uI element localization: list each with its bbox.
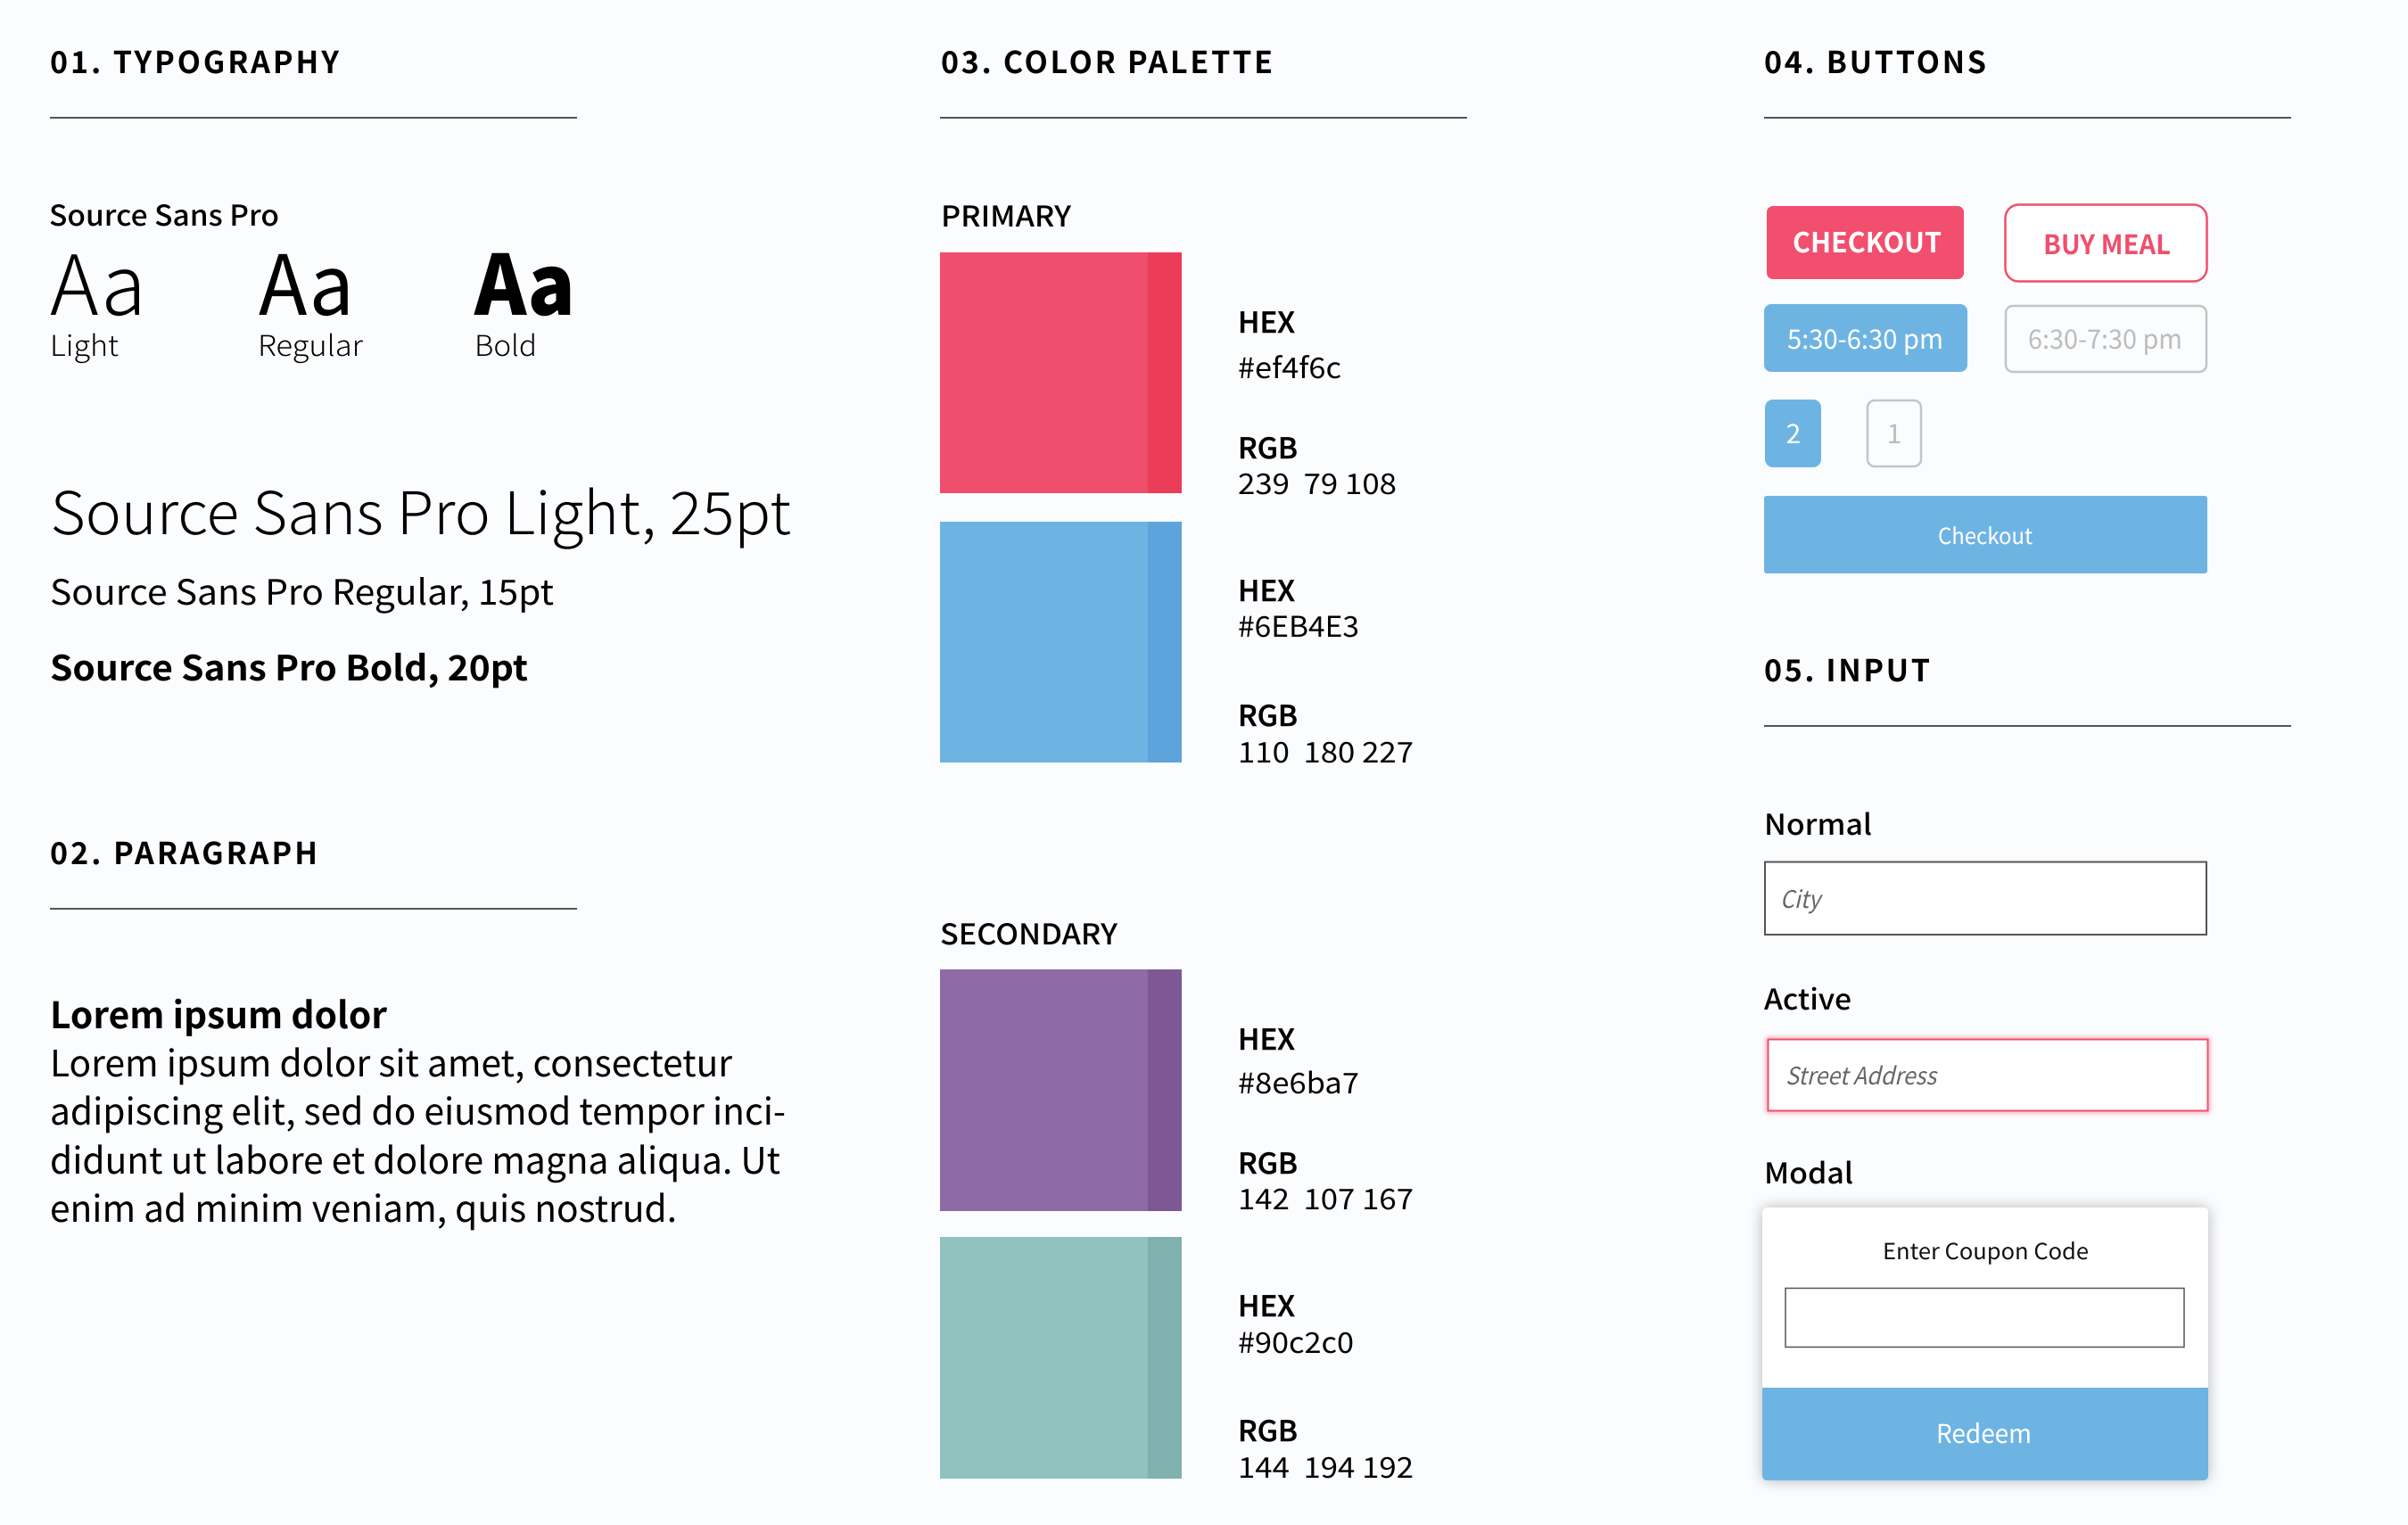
button: buy meal outline: [2005, 205, 2206, 282]
specimen: light: Light: [50, 324, 119, 365]
input: normal: [1765, 861, 2206, 935]
heading: 04 buttons: 04. BUTTONS: [1764, 38, 1986, 82]
paragraph body: adipiscing elit, sed do eiusmod tempor inci-: [50, 1082, 786, 1135]
values: blue: HEX: [1238, 569, 1295, 610]
modal redeem button: Redeem: [1936, 1414, 2032, 1451]
values: teal: [1238, 1284, 1414, 1487]
values: teal: HEX: [1238, 1284, 1295, 1325]
modal input: [1785, 1288, 2184, 1347]
values: purple: 142 107 167: [1238, 1177, 1414, 1218]
input: normal: City: [1780, 880, 1824, 915]
label: normal: Normal: [1764, 803, 1872, 844]
button: time slot selected: [1764, 304, 1967, 372]
values: purple: HEX: [1238, 1018, 1295, 1059]
values: red: 239 79 108: [1238, 462, 1397, 503]
values: red: HEX: [1238, 301, 1295, 342]
values: red: #ef4f6c: [1238, 346, 1341, 387]
swatch: teal: [940, 1237, 1182, 1479]
label: modal: Modal: [1764, 1151, 1853, 1192]
panel: buttons: [1764, 38, 2291, 573]
paragraph title: Lorem ipsum dolor: [50, 985, 387, 1039]
label: active: Active: [1764, 977, 1851, 1018]
button: checkout wide: [1764, 496, 2207, 573]
paragraph body: didunt ut labore et dolore magna aliqua. Ut: [50, 1131, 780, 1184]
values: blue: [1238, 569, 1414, 771]
button: quantity selected: 2: [1786, 412, 1801, 451]
button: quantity unselected: [1868, 400, 1921, 466]
swatch: red: [940, 252, 1182, 493]
swatch: purple: [940, 969, 1182, 1211]
panel: input: [1762, 647, 2291, 1480]
values: blue: 110 180 227: [1238, 730, 1414, 771]
specimen: bold: Bold: [474, 324, 537, 365]
button: time slot unselected: 6:30-7:30 pm: [2028, 317, 2182, 357]
values: blue: RGB: [1238, 694, 1298, 735]
label: primary: PRIMARY: [941, 194, 1071, 235]
label: secondary: SECONDARY: [940, 912, 1117, 953]
values: red: RGB: [1238, 426, 1298, 467]
button: time slot unselected: [2006, 306, 2206, 372]
sample: regular 15pt: Source Sans Pro Regular, 15pt: [50, 565, 554, 615]
values: red: [1238, 301, 1397, 503]
heading: 02 paragraph: 02. PARAGRAPH: [50, 829, 317, 873]
button: checkout red: CHECKOUT: [1793, 220, 1942, 260]
button: time slot selected: 5:30-6:30 pm: [1787, 317, 1943, 357]
values: purple: [1238, 1018, 1414, 1218]
button: quantity selected: [1765, 400, 1821, 467]
modal title: Enter Coupon Code: [1883, 1234, 2089, 1266]
paragraph body: enim ad minim veniam, quis nostrud.: [50, 1179, 677, 1232]
specimen: regular: Aa: [259, 218, 354, 339]
values: teal: 144 194 192: [1238, 1446, 1414, 1487]
paragraph body: Lorem ipsum dolor sit amet, consectetur: [50, 1034, 732, 1087]
heading: 03 color palette: 03. COLOR PALETTE: [941, 38, 1273, 82]
specimen: bold: Aa: [474, 218, 575, 339]
values: teal: RGB: [1238, 1409, 1298, 1450]
values: purple: #8e6ba7: [1238, 1061, 1359, 1102]
swatch: blue: [940, 522, 1182, 762]
button: checkout red: [1766, 205, 1965, 280]
panel: typography: [49, 38, 791, 691]
heading: 05 input: 05. INPUT: [1764, 647, 1930, 690]
button: checkout wide: Checkout: [1938, 519, 2033, 551]
specimen: light: Aa: [50, 218, 146, 339]
input: active: Street Address: [1785, 1057, 1938, 1092]
sample: bold 20pt: Source Sans Pro Bold, 20pt: [50, 641, 528, 691]
paragraph body: [50, 1034, 786, 1232]
panel: paragraph: [50, 829, 786, 1232]
button: buy meal outline: BUY MEAL: [2043, 223, 2171, 262]
values: purple: RGB: [1238, 1142, 1298, 1183]
values: blue: #6EB4E3: [1238, 605, 1359, 646]
specimen: regular: Regular: [258, 324, 364, 365]
heading: 01 typography: 01. TYPOGRAPHY: [50, 38, 339, 82]
button: quantity unselected: 1: [1887, 412, 1901, 451]
values: teal: #90c2c0: [1238, 1321, 1354, 1362]
input: active: [1768, 1040, 2208, 1111]
modal card: [1762, 1208, 2208, 1480]
modal redeem button: [1762, 1388, 2208, 1480]
panel: color palette: [940, 38, 1467, 1487]
font name: Source Sans Pro: [49, 194, 279, 235]
sample: light 25pt: Source Sans Pro Light, 25pt: [50, 466, 791, 552]
